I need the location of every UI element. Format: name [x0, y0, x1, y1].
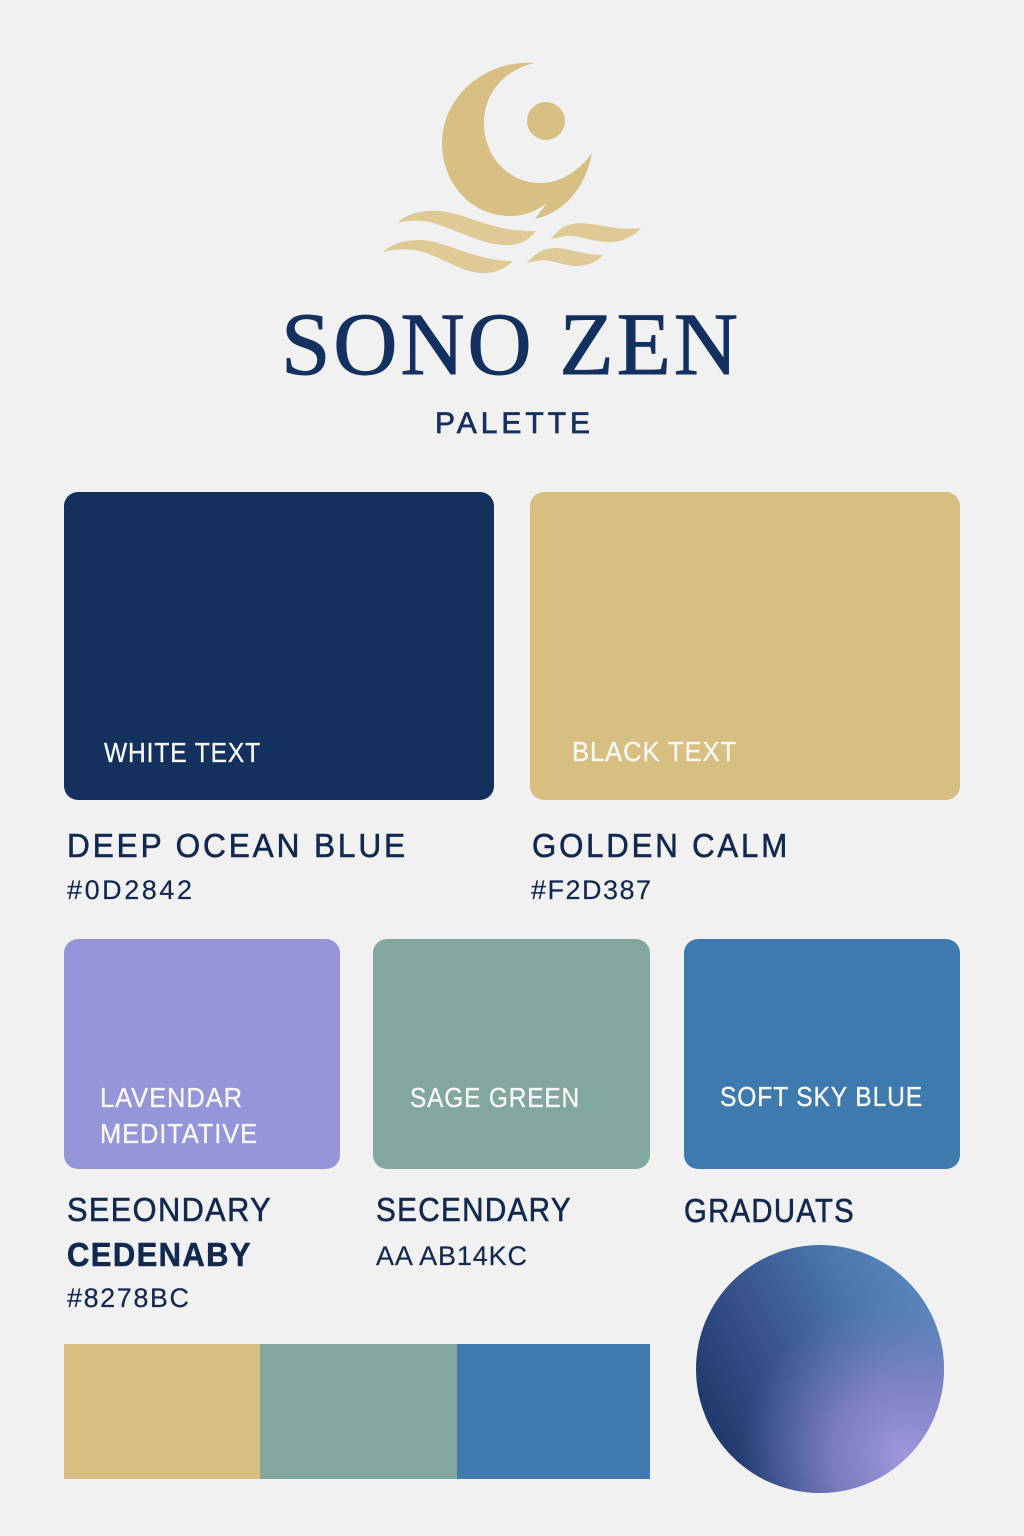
- hex code: deep ocean blue: #0D2842: [67, 875, 192, 905]
- swatch label: black text: BLACK TEXT: [572, 736, 737, 767]
- heading: graduats: GRADUATS: [684, 1192, 855, 1229]
- panel: golden calm: [530, 492, 960, 800]
- swatch label: lavendar meditative: [100, 1082, 258, 1149]
- swatch label: soft sky blue: SOFT SKY BLUE: [720, 1081, 923, 1112]
- swatch label: lavendar meditative: MEDITATIVE: [100, 1118, 258, 1149]
- heading: secendary: SECENDARY: [376, 1191, 572, 1228]
- icon: waves: [383, 211, 641, 273]
- icon: crescent moon: [442, 63, 592, 219]
- swatch label: white text: WHITE TEXT: [104, 737, 261, 768]
- palette strip: [64, 1344, 650, 1479]
- heading: seeondary cedenaby: SEEONDARY: [67, 1191, 272, 1228]
- heading: golden calm: GOLDEN CALM: [532, 827, 790, 864]
- panel: soft sky blue: [684, 939, 960, 1169]
- swatch label: lavendar meditative: LAVENDAR: [100, 1082, 243, 1113]
- gradient circle: [696, 1245, 944, 1493]
- logo: crescent moon over waves: [383, 63, 641, 273]
- hex code: golden calm: #F2D387: [531, 875, 651, 905]
- hex code: lavender: #8278BC: [67, 1283, 189, 1313]
- panel: deep ocean blue: [64, 492, 494, 800]
- panel: sage green: [373, 939, 650, 1169]
- subtitle: PALETTE: [435, 407, 590, 440]
- icon: sun dot: [527, 102, 565, 140]
- title: SONO ZEN: [281, 296, 738, 394]
- heading: seeondary cedenaby: [67, 1191, 272, 1273]
- panel: lavender meditative: [64, 939, 340, 1169]
- heading: seeondary cedenaby: CEDENABY: [67, 1236, 252, 1273]
- heading: deep ocean blue: DEEP OCEAN BLUE: [67, 827, 408, 864]
- swatch label: sage green: SAGE GREEN: [410, 1082, 580, 1113]
- code: sage green: AA AB14KC: [376, 1241, 527, 1271]
